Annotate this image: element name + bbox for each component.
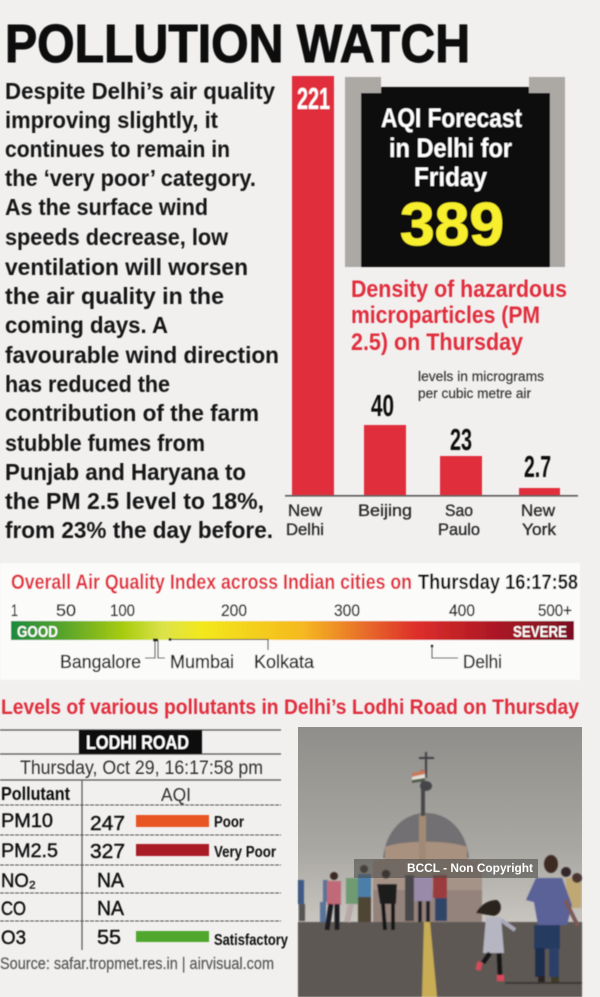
bar: New Delhi: [292, 76, 334, 495]
row: PM2.5: 327: [90, 841, 125, 863]
table header: [1, 784, 191, 805]
intro text block: has reduced the: [5, 371, 170, 397]
scale heading: Thursday 16:17:58: [418, 571, 578, 594]
intro text block: ventilation will worsen: [5, 254, 248, 280]
bar: Beijing: [364, 388, 406, 495]
bar: New Delhi: 221: [297, 81, 330, 116]
unit note: [418, 369, 544, 401]
panel: AQI forecast: Friday: [414, 162, 487, 192]
row: PM10: [1, 811, 244, 835]
intro text block: contribution of the farm: [5, 400, 259, 426]
chart heading: density: 2.5) on Thursday: [351, 329, 524, 356]
row: NO2: [1, 870, 125, 892]
row: O3: O3: [1, 928, 26, 949]
bar labels: New: [521, 501, 556, 520]
scale numbers: 50: [56, 601, 76, 620]
dome and drum: [383, 813, 469, 858]
city labels: Kolkata: [254, 652, 315, 672]
row: O3: Satisfactory: [214, 932, 288, 949]
row: PM2.5: [1, 841, 276, 863]
panel: AQI forecast: in Delhi for: [389, 133, 512, 163]
crowd: [298, 865, 582, 930]
bar labels: Delhi: [286, 520, 324, 539]
city labels: Delhi: [463, 652, 502, 672]
intro text block: improving slightly, it: [5, 107, 218, 133]
row: PM2.5: Very Poor: [214, 844, 276, 861]
photo: Rashtrapati Bhavan in haze: [298, 727, 582, 997]
table title: LODHI ROAD: [86, 733, 189, 754]
bar labels: New: [288, 501, 323, 520]
road: [298, 922, 582, 997]
bar: New York: 2.7: [524, 449, 551, 484]
chart heading: density: [351, 276, 567, 356]
intro text block: continues to remain in: [5, 136, 230, 162]
scale numbers: 200: [221, 601, 247, 620]
watermark: [354, 859, 538, 878]
bar: Sao Paulo: [440, 422, 482, 495]
panel: AQI forecast: 389: [400, 191, 504, 258]
bar: Sao Paulo: 23: [450, 422, 472, 457]
bar chart: PM 2.5 density: [285, 76, 578, 539]
scale numbers: [11, 601, 572, 620]
watermark: BCCL - Non Copyright: [407, 863, 533, 875]
gradient bar: [11, 621, 574, 641]
bar: New York: [519, 449, 560, 495]
panel: AQI forecast: [345, 77, 565, 267]
bar: Beijing: 40: [371, 388, 394, 423]
gradient bar: SEVERE: [513, 624, 567, 641]
intro text block: Despite Delhi’s air quality: [5, 78, 275, 104]
row: PM10: 247: [90, 813, 125, 835]
table header: Pollutant: [1, 784, 70, 804]
row: PM10: PM10: [1, 811, 53, 832]
row: O3: 55: [97, 927, 121, 949]
gradient bar: GOOD: [17, 624, 58, 641]
chart heading: density: Density of hazardous: [351, 276, 567, 303]
unit note: per cubic metre air: [418, 386, 532, 401]
intro text block: coming days. A: [5, 312, 168, 338]
row: NO2: NA: [97, 870, 125, 892]
row: PM10: Poor: [214, 814, 244, 831]
row: CO: [1, 898, 125, 920]
scale numbers: 500+: [538, 601, 572, 620]
city labels: Mumbai: [170, 652, 234, 672]
girl: [476, 900, 515, 981]
intro text block: speeds decrease, low: [5, 224, 228, 250]
scale numbers: 1: [11, 601, 18, 620]
city labels: [60, 652, 502, 672]
bar labels: York: [522, 520, 556, 539]
panel: AQI scale: [0, 563, 580, 680]
title: POLLUTION WATCH: [5, 14, 470, 74]
chart heading: density: microparticles (PM: [351, 302, 540, 329]
row: CO: NA: [97, 898, 125, 920]
city labels: Bangalore: [60, 652, 141, 672]
scale heading: Overall Air Quality Index across Indian cities on: [11, 571, 412, 594]
table: Lodhi Road: [0, 730, 288, 973]
intro text block: the air quality in the: [5, 283, 224, 309]
intro text block: As the surface wind: [5, 194, 208, 220]
intro text block: favourable wind direction: [5, 342, 279, 368]
scale numbers: 400: [449, 601, 475, 620]
city markers: [145, 638, 458, 658]
row: CO: CO: [1, 899, 26, 920]
intro text block: the PM 2.5 level to 18%,: [5, 488, 264, 514]
intro text block: Punjab and Haryana to: [5, 459, 246, 485]
bar labels: Paulo: [438, 520, 480, 539]
unit note: levels in micrograms: [418, 369, 544, 384]
intro text block: the ‘very poor’ category.: [5, 165, 256, 191]
row: PM2.5: PM2.5: [1, 841, 58, 862]
scale numbers: 300: [334, 601, 360, 620]
row: NO2: NO₂: [1, 871, 36, 892]
row: O3: [1, 927, 288, 949]
intro text block: stubble fumes from: [5, 430, 205, 456]
bar labels: Beijing: [358, 501, 412, 520]
source: Source: safar.tropmet.res.in | airvisual.com: [0, 955, 274, 973]
column and flag: [419, 815, 426, 865]
bar labels: [286, 501, 556, 539]
table header: AQI: [161, 785, 191, 805]
panel: AQI forecast: AQI Forecast: [381, 103, 522, 133]
scale numbers: 100: [110, 601, 135, 620]
table date: Thursday, Oct 29, 16:17:58 pm: [20, 758, 263, 779]
man: [505, 855, 582, 984]
intro text block: from 23% the day before.: [5, 517, 273, 543]
intro text block: [5, 78, 279, 543]
bar labels: Sao: [445, 501, 473, 520]
